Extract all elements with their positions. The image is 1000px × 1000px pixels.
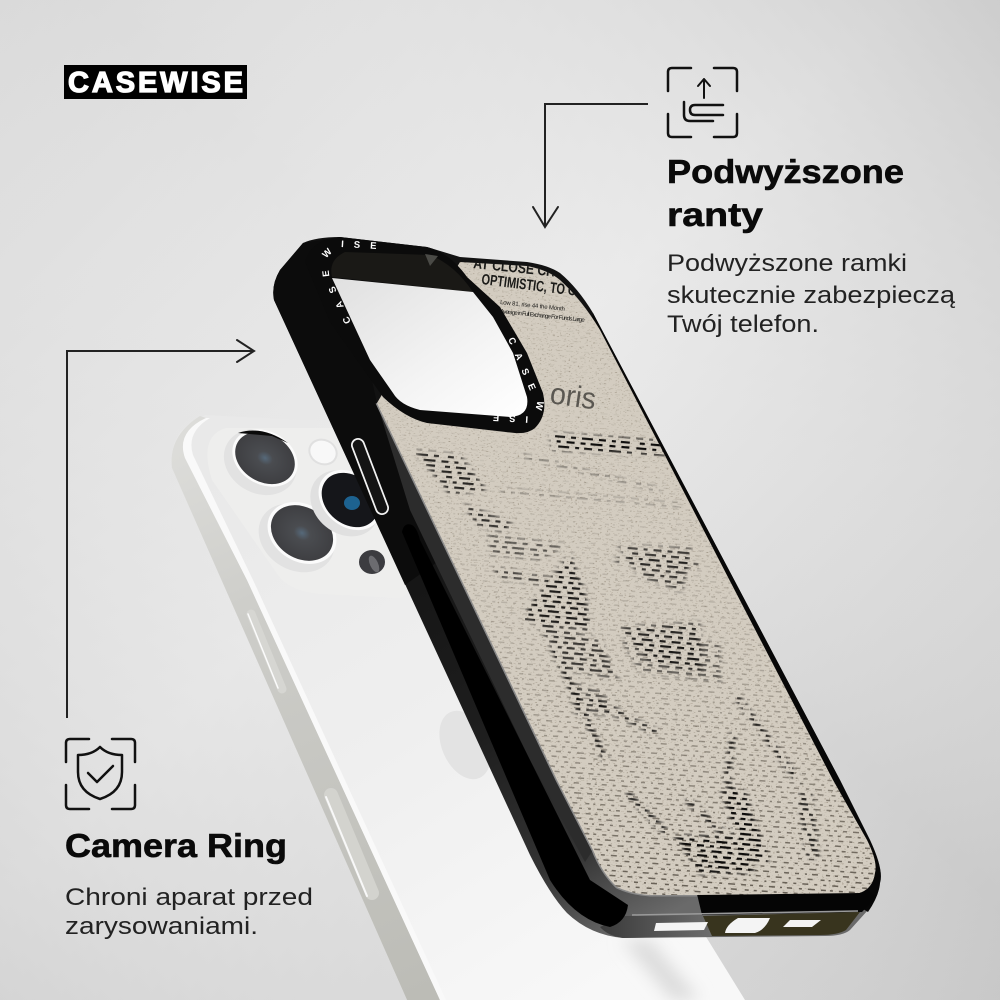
lens: bottom <box>246 487 349 586</box>
see-through opening <box>332 278 527 417</box>
black case <box>273 237 881 938</box>
inner grey rim <box>377 403 697 895</box>
arrow: top, pointing down to raised edge <box>533 104 648 227</box>
phone body <box>172 415 745 1000</box>
text: raised edges description: Twój telefon. <box>667 311 819 338</box>
port openings <box>654 918 821 933</box>
white phone behind the case <box>172 415 745 1000</box>
panel base colour <box>377 262 876 895</box>
newspaper headlines: Average in Full Exchange For Funds Large <box>500 309 586 324</box>
text: raised edges description: skutecznie zabezpieczą <box>667 282 956 309</box>
side slot <box>402 524 628 927</box>
lens: right <box>297 455 394 550</box>
phone side edge <box>172 416 440 1000</box>
heading: Podwyższone ranty: Podwyższone <box>667 153 904 190</box>
apple logo <box>429 703 501 787</box>
upper rim solid black <box>273 237 440 585</box>
side buttons <box>251 614 282 689</box>
newspaper headlines: oris <box>548 377 598 416</box>
soft shadow on phone bottom <box>622 940 700 1000</box>
ring text left: CASEWISE <box>321 240 376 324</box>
bottom black band <box>697 890 876 915</box>
icon: raised edges <box>668 68 737 137</box>
newspaper headlines: Low 81, rise 44 the Month <box>500 300 565 313</box>
right edge solid black <box>590 313 881 912</box>
heading: Camera Ring: Camera Ring <box>65 827 287 864</box>
newspaper headlines: AT CLOSE CH <box>473 255 556 281</box>
logo: CASEWISE: CASEWISE <box>68 67 243 99</box>
heading: Podwyższone ranty <box>667 153 904 233</box>
ring text right: CASEWISE <box>493 338 544 423</box>
camera plateau <box>207 428 412 598</box>
bottom port face, right <box>703 912 860 936</box>
grey band beside back panel <box>377 403 593 862</box>
bottom port face, left <box>600 915 712 938</box>
flash <box>305 435 341 469</box>
newspaper back panel <box>377 262 876 895</box>
text: camera ring description: Chroni aparat przed <box>65 884 313 911</box>
sensor <box>359 550 385 574</box>
lens: top <box>212 415 309 508</box>
text: camera ring description: zarysowaniami. <box>65 913 258 940</box>
arrow: left, pointing right to camera ring <box>67 340 254 718</box>
heading: Podwyższone ranty: ranty <box>667 196 764 233</box>
dark halftone figure <box>416 430 823 878</box>
camera ring <box>321 237 544 434</box>
case outer shell <box>273 237 881 938</box>
inner wall <box>331 252 473 292</box>
icon: shield <box>66 739 135 809</box>
newspaper headlines <box>473 263 595 409</box>
small print rows <box>370 255 890 905</box>
text: raised edges description <box>667 250 956 338</box>
side switch <box>358 445 382 508</box>
text: raised edges description: Podwyższone ramki <box>667 250 907 277</box>
newspaper headlines: OPTIMISTIC, TO C <box>481 271 577 300</box>
ring body <box>305 237 544 433</box>
fine specks <box>370 255 890 905</box>
text: camera ring description <box>65 884 313 940</box>
bottom highlight line <box>632 911 858 915</box>
